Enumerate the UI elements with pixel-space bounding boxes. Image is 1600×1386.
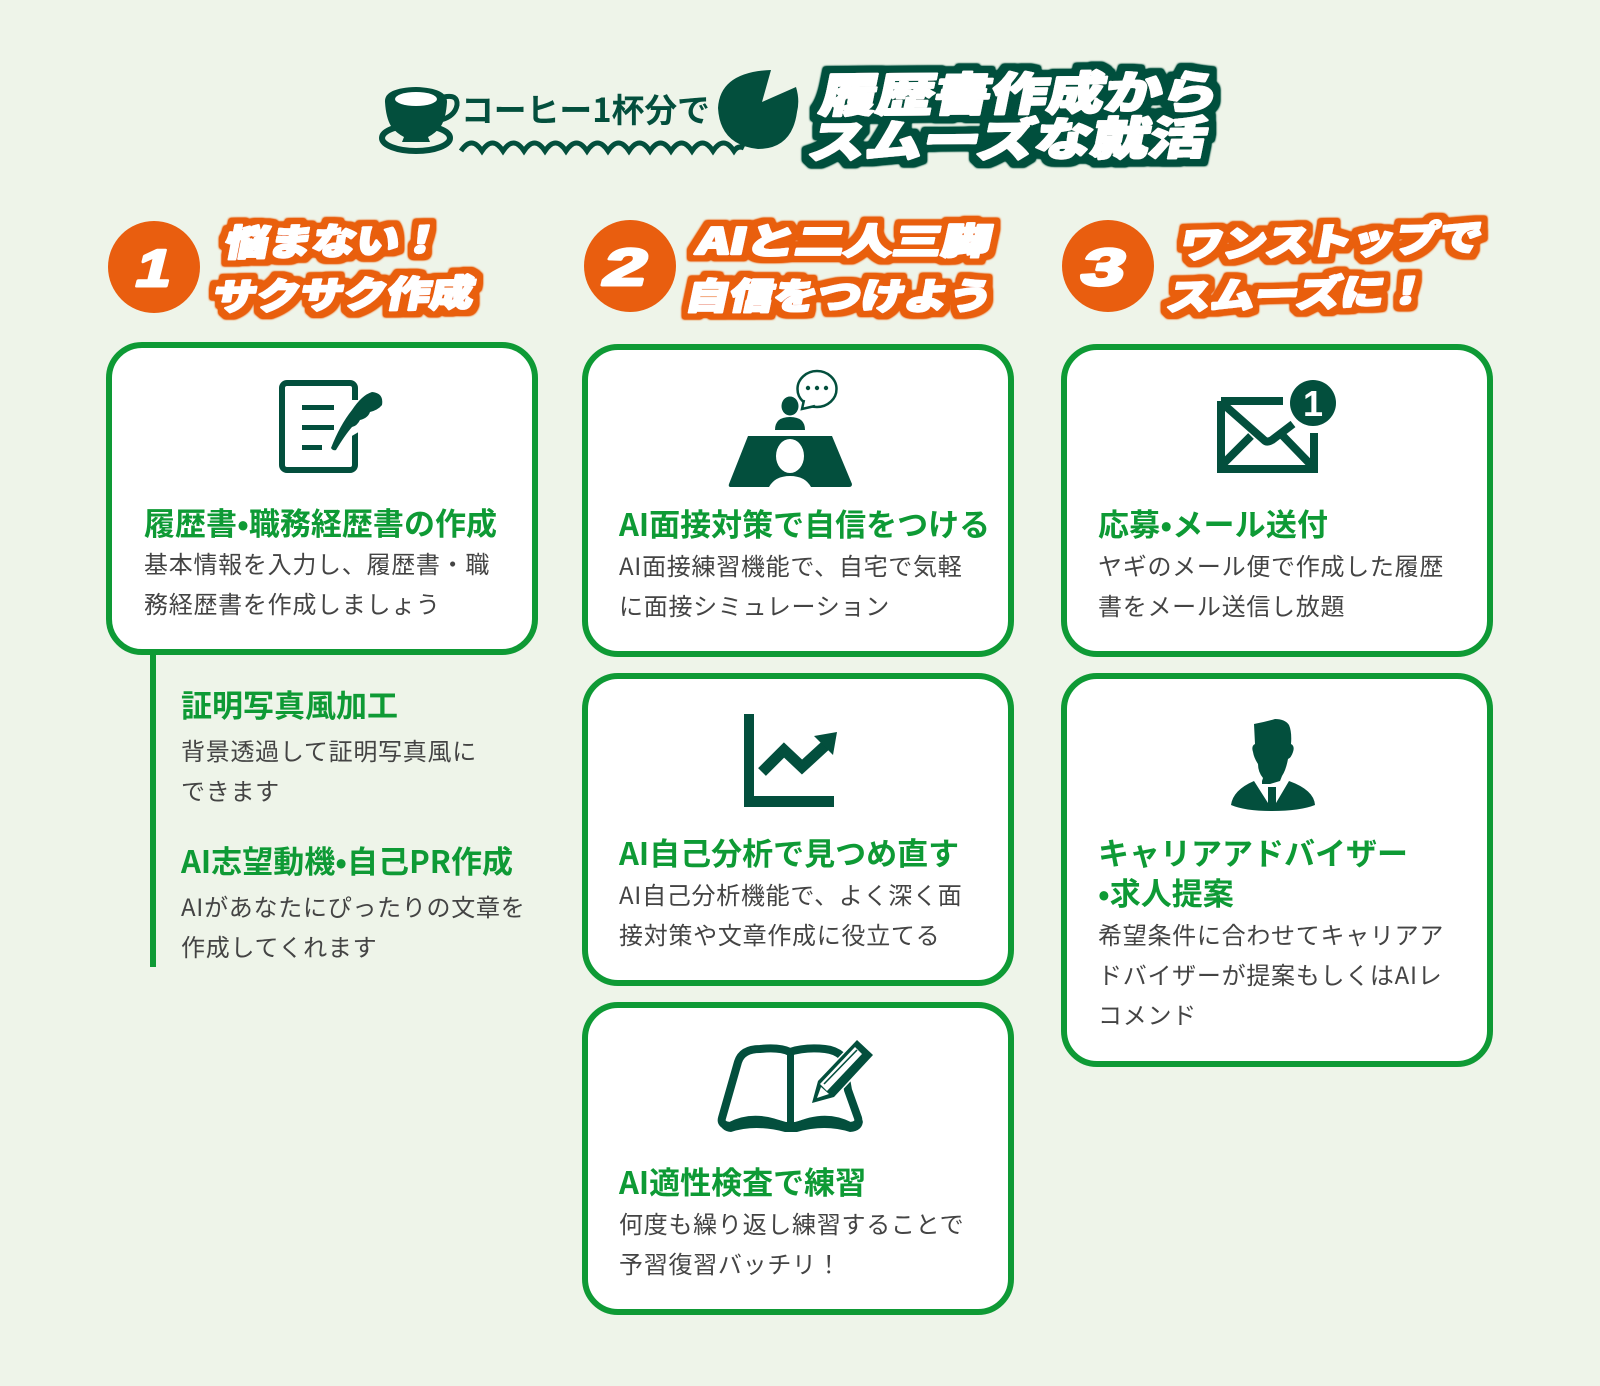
description xyxy=(1098,916,1444,1031)
description: 希望条件に合わせてキャリアア xyxy=(1098,916,1444,951)
section 1 heading: 1 xyxy=(130,240,179,298)
sub-feature: ID photo: できます xyxy=(181,772,280,807)
description: 予習復習バッチリ！ xyxy=(619,1245,841,1280)
description: 書をメール送信し放題 xyxy=(1098,587,1345,622)
icon: person in suit xyxy=(1231,719,1315,811)
description xyxy=(1098,547,1444,622)
panel: AI aptitude test xyxy=(585,1005,1011,1312)
icon: document and quill xyxy=(282,383,382,470)
description: に面接シミュレーション xyxy=(619,587,890,622)
heading: 応募•メール送付 xyxy=(1098,500,1328,545)
section 3 heading: 3 xyxy=(1075,238,1133,297)
title block xyxy=(382,56,1226,172)
icon: coffee cup on saucer xyxy=(382,87,457,151)
sub-feature: ID photo xyxy=(181,681,477,807)
panel: AI self analysis xyxy=(585,676,1011,983)
icon: open book and pencil xyxy=(719,1040,873,1132)
description xyxy=(619,547,962,622)
heading: •求人提案 xyxy=(1098,869,1234,914)
description xyxy=(619,876,962,951)
description: 基本情報を入力し、履歴書・職 xyxy=(144,545,490,580)
description: ドバイザーが提案もしくはAIレ xyxy=(1098,956,1442,991)
description: コメンド xyxy=(1098,996,1197,1031)
heading: AI適性検査で練習 xyxy=(618,1158,866,1203)
heading: AI面接対策で自信をつける xyxy=(618,500,990,545)
section 3 heading xyxy=(1062,209,1487,321)
description: 接対策や文章作成に役立てる xyxy=(619,916,940,951)
sub-feature: AI motivation and PR: 作成してくれます xyxy=(181,928,377,963)
icon: interview across table xyxy=(729,371,852,487)
description xyxy=(619,1205,964,1280)
icon: pie with a wedge cut out xyxy=(718,70,798,149)
main heading xyxy=(803,56,1226,172)
section 2 heading: 2 xyxy=(597,238,655,297)
main heading: 履歴書作成から xyxy=(815,56,1226,126)
section 1 heading: サクサク作成 xyxy=(209,265,480,321)
section 2 heading xyxy=(584,213,999,320)
icon: envelope with badge xyxy=(1221,380,1336,469)
description: AI自己分析機能で、よく深く面 xyxy=(619,876,962,911)
heading: AI自己分析で見つめ直す xyxy=(618,829,959,874)
description: ヤギのメール便で作成した履歴 xyxy=(1098,547,1444,582)
heading: キャリアアドバイザー xyxy=(1098,829,1408,874)
section 1 heading xyxy=(108,212,480,321)
sub-feature: AI motivation and PR xyxy=(180,837,525,963)
section 3 heading: ワンストップで xyxy=(1176,209,1487,269)
description: AI面接練習機能で、自宅で気軽 xyxy=(619,547,962,582)
section 3 heading: スムーズに！ xyxy=(1163,262,1434,321)
description: 何度も繰り返し練習することで xyxy=(619,1205,964,1240)
heading: 履歴書•職務経歴書の作成 xyxy=(144,499,497,544)
vertical connector line xyxy=(150,650,156,967)
sub-feature: AI motivation and PR: AI志望動機•自己PR作成 xyxy=(180,837,513,882)
section 2 heading: 自信をつけよう xyxy=(682,268,999,320)
panel: resume creation xyxy=(109,345,535,652)
panel: applying and sending mail xyxy=(1064,347,1490,654)
panel: AI interview practice xyxy=(585,347,1011,654)
icon: envelope with badge: 1 xyxy=(1303,383,1323,424)
description xyxy=(144,545,490,620)
subtitle: coffee one cup: コーヒー1杯分で xyxy=(461,84,710,132)
sub-feature: ID photo: 背景透過して証明写真風に xyxy=(181,732,477,767)
main heading: スムーズな就活 xyxy=(803,102,1214,172)
description: 務経歴書を作成しましょう xyxy=(144,585,441,620)
wavy underline xyxy=(461,143,744,151)
sub-feature: AI motivation and PR: AIがあなたにぴったりの文章を xyxy=(181,888,525,923)
section 2 heading: AIと二人三脚 xyxy=(691,213,998,265)
section 1 heading: 悩まない！ xyxy=(221,212,449,267)
panel: career adviser xyxy=(1064,676,1490,1064)
icon: rising chart xyxy=(744,714,837,807)
sub-feature: ID photo: 証明写真風加工 xyxy=(181,681,398,726)
heading xyxy=(1098,829,1408,914)
